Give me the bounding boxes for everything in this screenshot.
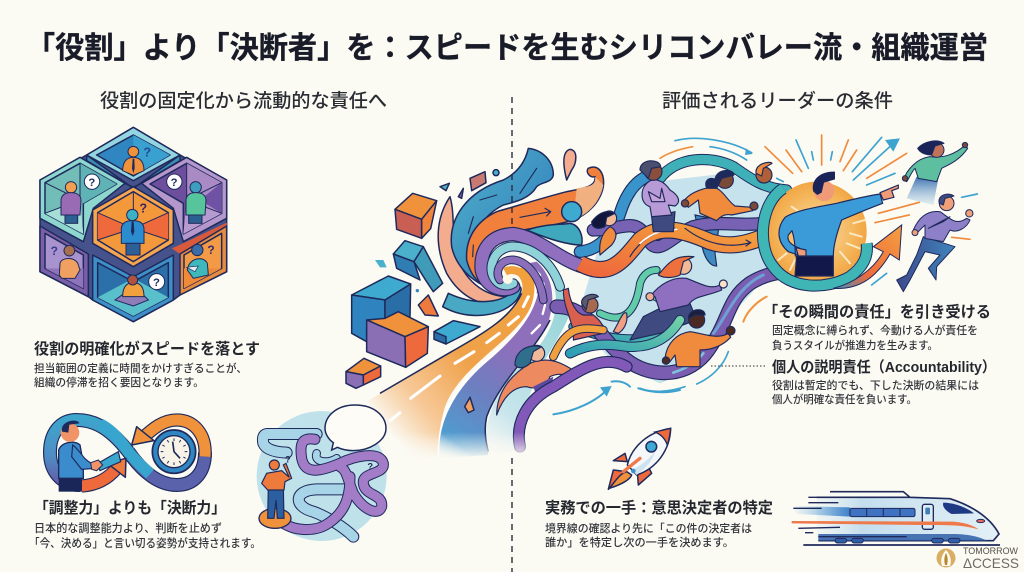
peach drop — [564, 149, 576, 180]
box: center orange: ? — [139, 202, 147, 216]
person: leader pointing — [779, 172, 898, 276]
icon: infinity handshake and clock — [50, 420, 205, 492]
speech bubble — [325, 405, 386, 451]
road bottom fade — [362, 432, 527, 464]
red arrow — [82, 458, 126, 486]
person: man with raised arm — [563, 288, 627, 340]
box: right purple: ? — [171, 177, 178, 189]
box: lower left purple: ? — [51, 244, 58, 258]
orange arrow — [833, 225, 902, 288]
runner: woman top right — [902, 141, 968, 205]
right column heading: 評価されるリーダーの条件 — [662, 90, 893, 112]
road: orange lane — [368, 267, 534, 458]
person — [59, 421, 121, 492]
person: teal hair head — [756, 162, 772, 183]
accents — [743, 297, 767, 322]
box: lower right orange: ? — [207, 243, 215, 257]
icon: rocket — [608, 428, 671, 489]
box: lower left purple — [40, 226, 88, 297]
cube teal broken — [393, 241, 443, 292]
blue upper arm — [451, 148, 553, 290]
band: purple large lower — [557, 272, 793, 373]
box: right purple — [142, 157, 227, 242]
center divider upper — [511, 97, 513, 228]
body text: 負うスタイルが推進力を生みます。 — [772, 338, 938, 352]
runner: man bottom right — [897, 194, 973, 292]
person: diving figure — [497, 345, 580, 415]
box: top blue — [87, 127, 180, 188]
light blue maze path — [263, 434, 353, 537]
arrow: blue small — [553, 381, 680, 414]
hero circle — [763, 182, 867, 286]
peach arm — [438, 197, 513, 304]
rays — [765, 135, 977, 285]
box: bottom blue — [93, 255, 173, 322]
box: left teal — [40, 157, 125, 242]
swirl arms — [438, 148, 604, 315]
logo: Tomorrow Access — [936, 546, 1018, 568]
person: woman with black hair — [592, 211, 617, 255]
left block: role clarity — [34, 340, 260, 389]
dotted connector — [711, 365, 765, 367]
logo mark — [936, 548, 956, 568]
teal splash — [527, 223, 582, 245]
plate blue — [434, 321, 480, 344]
band: teal top arc — [660, 159, 787, 190]
subheading: 役割の明確化がスピードを落とす — [34, 340, 260, 358]
right block: next step — [545, 499, 773, 549]
right block: accountability — [772, 358, 996, 406]
icon: hexagonal role boxes — [40, 127, 227, 322]
band: blue rising — [580, 175, 650, 252]
purple maze path — [283, 439, 383, 530]
person: orange runner woman — [681, 170, 758, 221]
box: bottom blue: ? — [153, 277, 160, 289]
flowing bands and team — [557, 135, 977, 391]
subheading: 「調整力」よりも「決断力」 — [34, 499, 226, 517]
light blue flow background — [577, 173, 770, 383]
body text: 役割は暫定的でも、下した決断の結果には — [772, 378, 979, 392]
road: light channel — [486, 283, 573, 455]
body text: 「今、決める」と言い切る姿勢が支持されます。 — [29, 536, 261, 550]
confused person: ? — [367, 461, 373, 471]
left block: decisiveness — [29, 499, 261, 550]
box: left teal: ? — [88, 177, 95, 189]
confused person — [259, 455, 373, 528]
box: lower right orange — [172, 223, 227, 295]
subheading: 個人の説明責任（Accountability） — [772, 358, 996, 376]
road: purple-blue lane — [439, 262, 552, 458]
body text: 誰か」を特定し次の一手を決めます。 — [545, 535, 734, 549]
left column heading: 役割の固定化から流動的な責任へ — [100, 90, 387, 112]
icon: maze and confused person — [257, 405, 387, 541]
person: red-haired runner — [630, 256, 727, 340]
shards — [375, 170, 499, 316]
band: orange with arrow — [580, 228, 760, 270]
band: green — [573, 270, 671, 339]
central vortex illustration — [346, 148, 604, 458]
logo text: TOMORROW — [963, 546, 1018, 557]
cube purple orange — [367, 312, 428, 367]
logo word: ΔCCESS — [963, 555, 1019, 571]
runner leg behind bands — [695, 215, 720, 266]
title: 「役割」より「決断者」を：スピードを生むシリコンバレー流・組織運営 — [26, 32, 988, 65]
box: top blue: ? — [143, 146, 151, 160]
subheading: 「その瞬間の責任」を引き受ける — [763, 302, 991, 321]
cube small — [346, 358, 381, 388]
cube blue large — [352, 276, 411, 342]
body text: 組織の停滞を招く要因となります。 — [34, 376, 204, 389]
right block: take responsibility — [763, 302, 991, 352]
clock — [152, 430, 196, 473]
orange arm — [467, 167, 604, 292]
cube orange — [395, 193, 437, 238]
floating people over the swirl — [497, 211, 680, 447]
center divider lower — [511, 458, 513, 572]
teal lower arm — [443, 286, 521, 315]
band: purple mid — [593, 223, 763, 247]
broken cubes — [346, 170, 499, 388]
box: center orange — [93, 187, 173, 267]
body text: 境界線の確認より先に「この件の決定者は — [545, 521, 752, 535]
body text: 日本的な調整能力より、判断を止めず — [34, 521, 222, 535]
body text: 担当範囲の定義に時間をかけすぎることが、 — [34, 362, 247, 375]
person: purple arms crossed — [640, 161, 679, 232]
body text: 固定概念に縛られず、今動ける人が責任を — [772, 323, 978, 337]
inner swirl — [481, 234, 583, 300]
body text: 個人が明確な責任を負います。 — [772, 392, 917, 406]
icon: bullet train — [792, 492, 1000, 545]
orange arc arrow — [132, 420, 205, 457]
subheading: 実務での一手：意思決定者の特定 — [545, 499, 773, 517]
confused person: ? — [285, 455, 291, 465]
person: orange runner man — [662, 310, 735, 367]
band: teal-orange lower — [519, 320, 680, 447]
